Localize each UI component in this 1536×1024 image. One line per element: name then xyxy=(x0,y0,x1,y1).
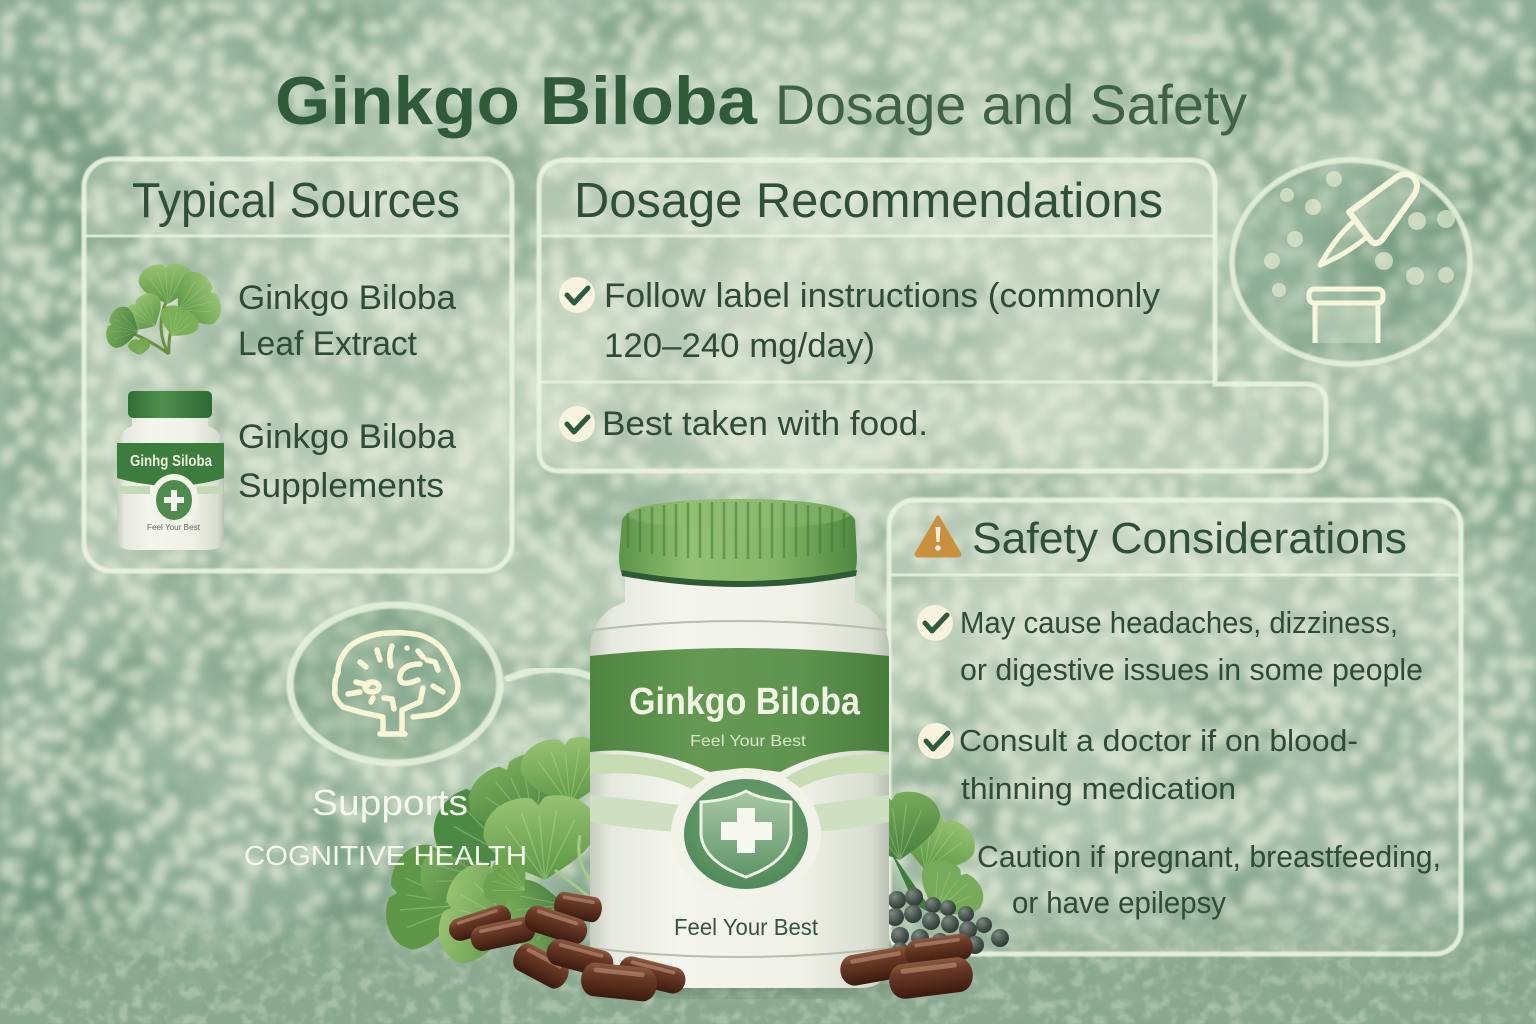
callout: brain icon circle xyxy=(290,605,592,763)
text: side effects: or digestive issues in some people xyxy=(960,652,1423,687)
bottle label title: Ginkgo Biloba xyxy=(629,681,861,723)
text: supplements: Ginkgo Biloba xyxy=(238,418,456,456)
icon: brain xyxy=(335,633,458,734)
title: Dosage and Safety xyxy=(775,73,1247,136)
emblem: shield with cross xyxy=(671,768,821,900)
text: best taken with food: Best taken with food. xyxy=(602,405,928,443)
icon: check xyxy=(559,406,595,442)
text: supports cognitive health: Supports xyxy=(312,782,468,823)
text: consult a doctor: Consult a doctor if on blood- xyxy=(959,723,1358,758)
capsules: left pile xyxy=(446,890,688,1003)
text: label instructions: Follow label instructions (commonly xyxy=(604,277,1160,315)
text: supports cognitive health: COGNITIVE HEALTH xyxy=(244,840,527,871)
text: supports cognitive health xyxy=(244,782,527,871)
bottle cap xyxy=(619,499,857,587)
text: label instructions: 120–240 mg/day) xyxy=(604,327,875,365)
heading: typical sources: Typical Sources xyxy=(132,174,460,228)
heading: dosage recommendations: Dosage Recommendations xyxy=(574,174,1163,228)
leaves behind bottle, left xyxy=(380,734,616,974)
bottle body xyxy=(590,575,889,988)
panel: safety considerations xyxy=(889,500,1461,954)
panel: dosage recommendations xyxy=(539,160,1326,471)
text: leaf extract: Leaf Extract xyxy=(238,325,418,363)
icon: check xyxy=(559,277,595,313)
leaves behind bottle, right xyxy=(845,787,992,932)
bottle label tagline: Feel Your Best xyxy=(690,733,807,750)
heading: safety considerations: Safety Considerations xyxy=(972,514,1407,563)
bottle label band xyxy=(590,648,889,772)
dark berries xyxy=(886,888,1009,958)
title: Ginkgo Biloba xyxy=(275,63,758,139)
text: leaf extract: Ginkgo Biloba xyxy=(238,279,456,317)
icon: dropper and vial circle xyxy=(1232,160,1470,364)
text: consult a doctor: thinning medication xyxy=(961,771,1236,806)
icon: small supplement bottle xyxy=(117,391,224,550)
icon: check xyxy=(918,723,954,759)
panel: typical sources xyxy=(82,159,512,571)
icon: warning triangle xyxy=(916,517,960,556)
capsules: right pile xyxy=(838,932,975,1000)
text: caution: Caution if pregnant, breastfeeding, xyxy=(977,839,1441,874)
main supplement bottle xyxy=(580,499,900,995)
icon: small supplement bottle: Ginhg Siloba xyxy=(130,453,212,470)
text: caution: or have epilepsy xyxy=(1012,885,1226,920)
text: side effects: May cause headaches, dizziness, xyxy=(960,605,1398,640)
bottle bottom tagline: Feel Your Best xyxy=(674,914,819,940)
icon: ginkgo leaf sprig xyxy=(103,262,228,356)
icon: small supplement bottle: Feel Your Best xyxy=(147,523,201,532)
text: supplements: Supplements xyxy=(238,467,444,505)
title xyxy=(275,63,1247,139)
icon: check xyxy=(917,605,953,641)
